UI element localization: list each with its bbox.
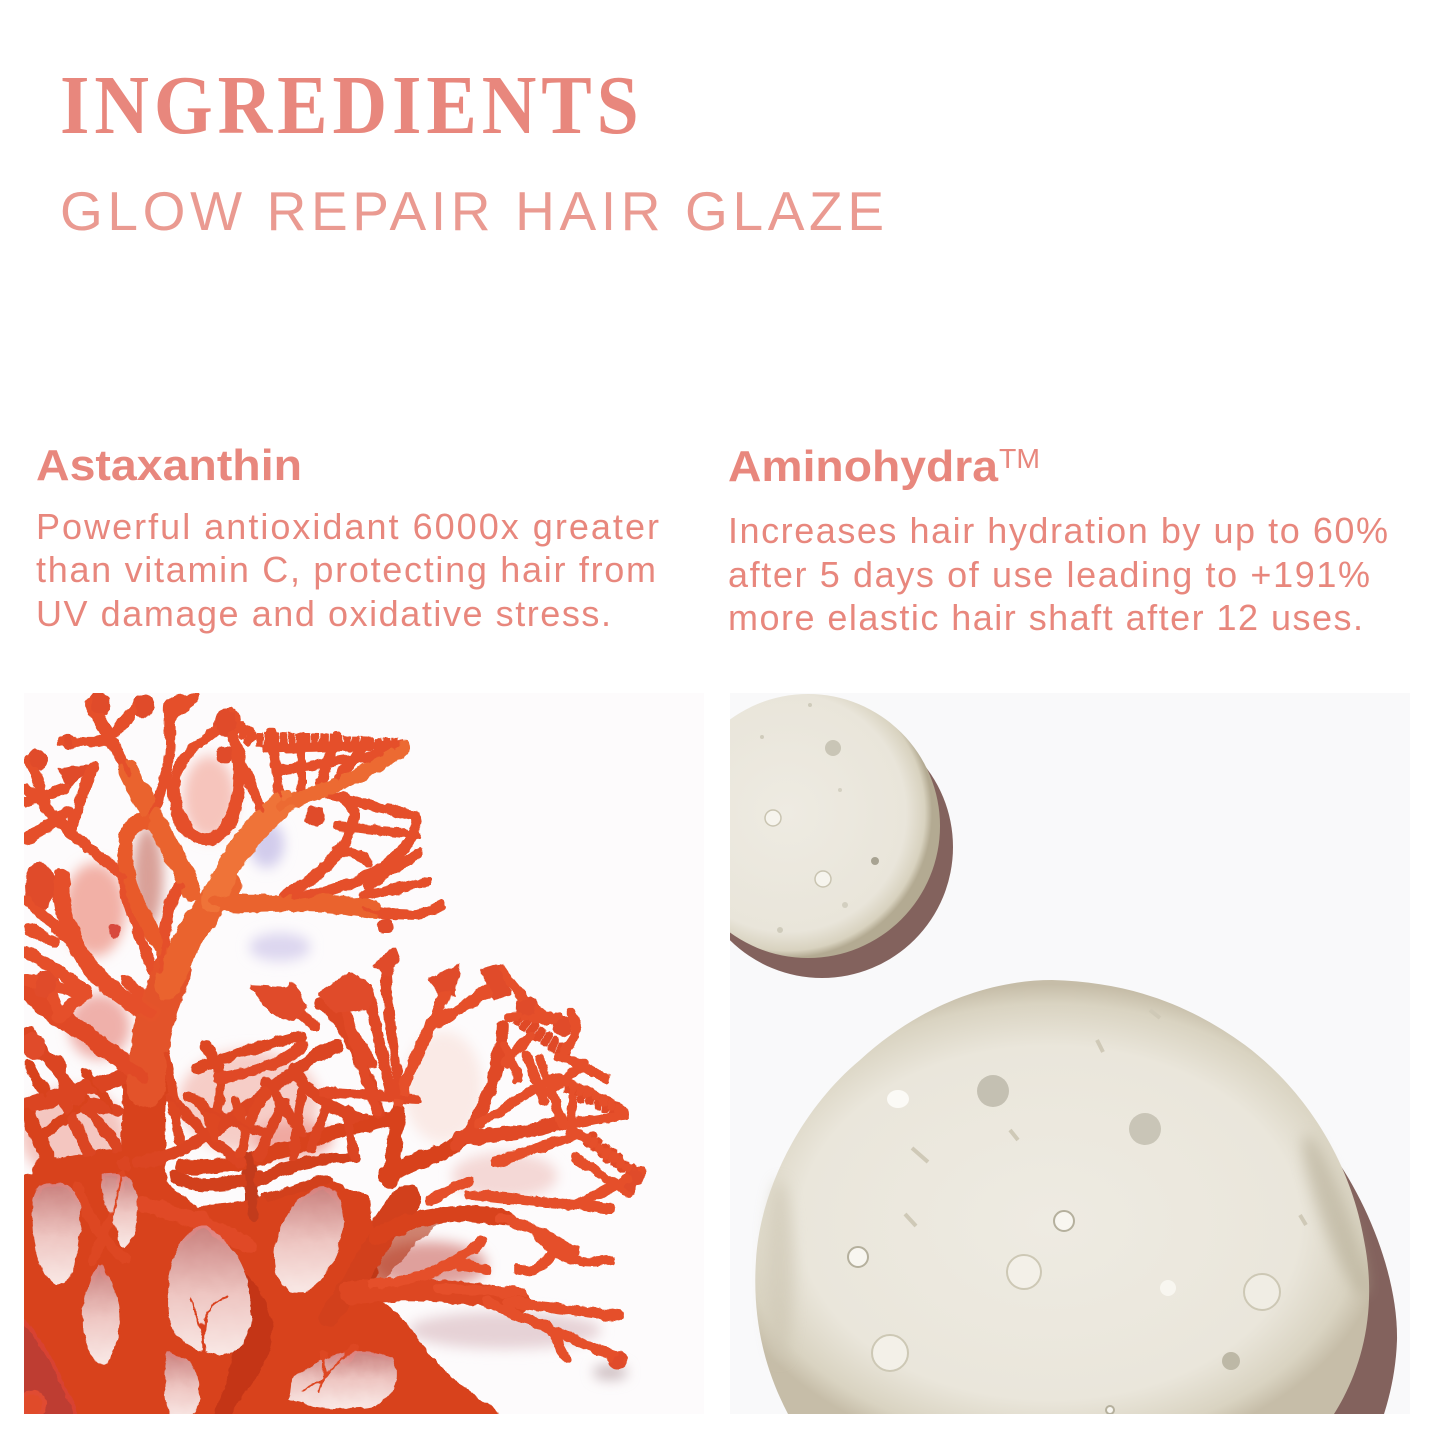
heading: Astaxanthin: Astaxanthin bbox=[36, 441, 302, 490]
subtitle: GLOW REPAIR HAIR GLAZE bbox=[60, 180, 884, 242]
trunk bbox=[143, 1078, 146, 1419]
description: Aminohydra: after 5 days of use leading to +191% bbox=[728, 554, 1370, 595]
frond tips bbox=[22, 694, 644, 1417]
large droplet shadow bbox=[1334, 1167, 1398, 1414]
description: Astaxanthin bbox=[36, 506, 659, 634]
mid left bbox=[27, 989, 143, 1078]
description: Aminohydra bbox=[728, 510, 1388, 638]
description: Astaxanthin: Powerful antioxidant 6000x greater bbox=[36, 506, 659, 547]
description: Aminohydra: Increases hair hydration by up to 60% bbox=[728, 510, 1388, 551]
upper arms bbox=[214, 802, 284, 900]
title: INGREDIENTS bbox=[60, 59, 639, 152]
curled sprout bbox=[190, 1297, 227, 1351]
ingredient text: Astaxanthin bbox=[36, 441, 659, 634]
heading: Aminohydra: TM bbox=[999, 443, 1040, 474]
holes in coral bbox=[34, 1175, 395, 1419]
branches bbox=[27, 697, 641, 1419]
small droplet shadow bbox=[730, 768, 953, 978]
small droplet bbox=[730, 694, 940, 958]
soft shadows bbox=[20, 755, 628, 1379]
middle thicket bbox=[139, 1045, 337, 1162]
description: Astaxanthin: UV damage and oxidative stress. bbox=[36, 593, 611, 634]
description: Astaxanthin: than vitamin C, protecting hair from bbox=[36, 549, 656, 590]
photo panel: gel droplets bbox=[676, 693, 1410, 1414]
photo panel: red algae bbox=[20, 693, 704, 1419]
ingredient text: Aminohydra bbox=[728, 442, 1388, 638]
description: Aminohydra: more elastic hair shaft after 12 uses. bbox=[728, 597, 1363, 638]
coral bbox=[20, 694, 644, 1419]
lower links bbox=[136, 1196, 256, 1252]
small branches over holes bbox=[110, 1174, 356, 1393]
large droplet bbox=[755, 980, 1377, 1414]
lower coral mass bbox=[20, 1160, 498, 1419]
heading: Aminohydra: Aminohydra bbox=[728, 442, 999, 491]
right tree bbox=[356, 1184, 422, 1282]
